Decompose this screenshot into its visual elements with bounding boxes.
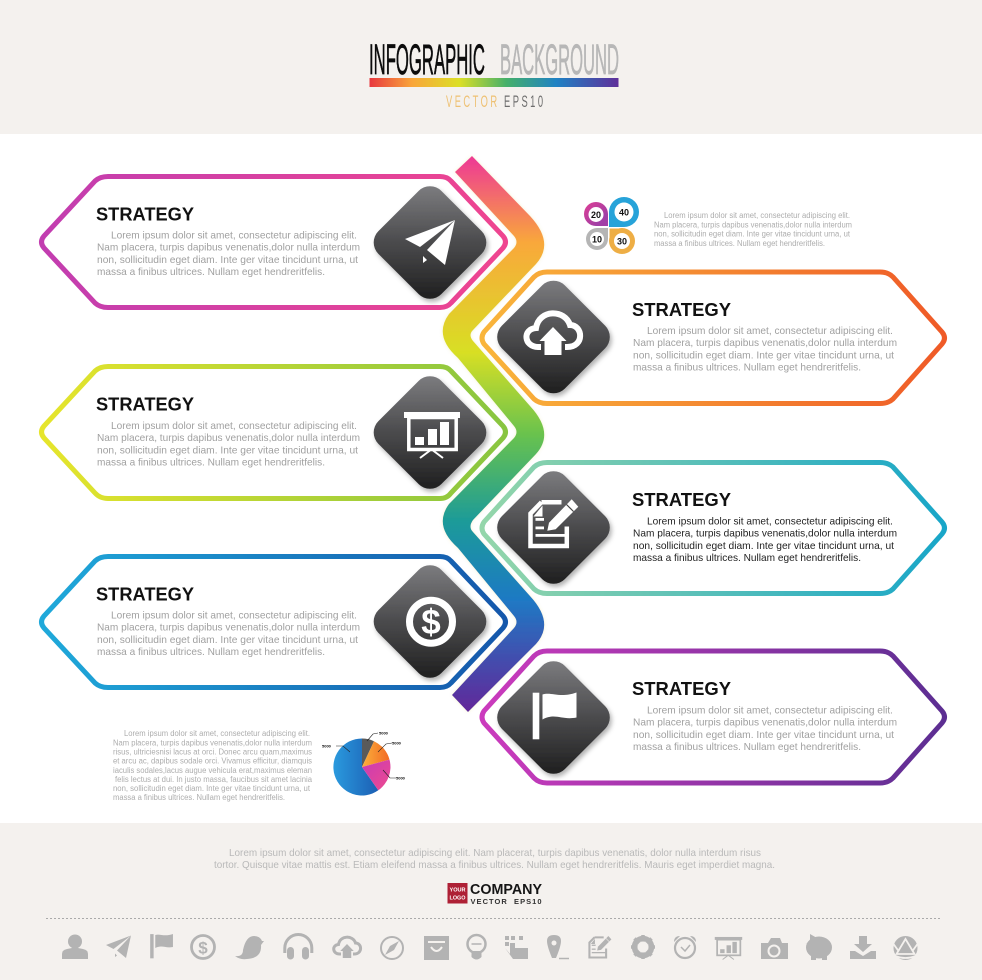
panel 2: strategy right top: Nam placera, turpis dapibus venenatis,dolor nulla interdum [633, 337, 897, 349]
company logo: YOUR [450, 888, 466, 894]
panel 3: strategy left middle: non, sollicitudin eget diam. Inte ger vitae tincidunt urna, ut [97, 444, 358, 456]
icon: flag [150, 934, 173, 958]
icon: alarm clock [674, 936, 696, 958]
text block: lower left note: risus, ultriciesnisi lacus at orci. Donec arcu quam,maximus [113, 748, 312, 756]
panel 2: strategy right top [482, 272, 944, 404]
icon: document pencil diamond [491, 465, 616, 590]
panel 1: strategy left top: non, sollicitudin eget diam. Inte ger vitae tincidunt urna, ut [97, 254, 358, 266]
panel 1: strategy left top [42, 176, 506, 308]
panel 1: strategy left top: STRATEGY [96, 204, 195, 224]
icon: download [850, 936, 876, 959]
text block: lower left note: massa a finibus ultrices. Nullam eget hendreritfelis. [113, 793, 285, 802]
panel 5: strategy left bottom: Lorem ipsum dolor sit amet, consectetur adipiscing elit. [111, 610, 357, 622]
text block: lower left note: iaculis sodales,lacus augue vehicula erat,maximus eleman [113, 766, 312, 775]
panel 4: strategy right middle: STRATEGY [632, 489, 732, 510]
text block: lower left note [113, 729, 313, 802]
icon: chart [715, 937, 742, 959]
text block: top right note: massa a finibus ultrices. Nullam eget hendreritfelis. [654, 239, 825, 248]
text block: lower left note: non, sollicitudin eget diam. Inte ger vitae tincidunt urna, ut [113, 784, 311, 793]
panel 6: strategy right bottom: Lorem ipsum dolor sit amet, consectetur adipiscing elit. [647, 704, 893, 716]
icon: plane [106, 936, 131, 958]
panel 6: strategy right bottom: STRATEGY [632, 678, 732, 699]
icon: piggy bank [805, 934, 832, 960]
text block: top right note: non, sollicitudin eget diam. Inte ger vitae tincidunt urna, ut [654, 230, 851, 238]
panel 3: strategy left middle [42, 366, 506, 498]
icon: document [589, 936, 611, 958]
chart: bubble petals: 40 [619, 208, 629, 218]
footer band [0, 823, 982, 980]
panel 2: strategy right top: STRATEGY [632, 299, 732, 320]
icon: camera [761, 938, 788, 959]
panel 4: strategy right middle: non, sollicitudin eget diam. Inte ger vitae tincidunt urna, ut [633, 540, 894, 552]
panel 6: strategy right bottom [482, 651, 944, 783]
panel 3: strategy left middle: Lorem ipsum dolor sit amet, consectetur adipiscing elit. [111, 420, 357, 432]
text block: lower left note: et arcu ac, dapibus sodale orci. Vivamus efficitur, diamquis [113, 757, 312, 766]
icon: bulb [468, 935, 486, 960]
chart: bubble petals: 30 [617, 236, 627, 246]
text block: footer note [214, 847, 775, 871]
panel 2: strategy right top: massa a finibus ultrices. Nullam eget hendreritfelis. [633, 362, 861, 374]
panel 2: strategy right top: non, sollicitudin eget diam. Inte ger vitae tincidunt urna, ut [633, 349, 894, 361]
footer icon row [62, 934, 918, 960]
panel 3: strategy left middle: Nam placera, turpis dapibus venenatis,dolor nulla interdum [97, 432, 360, 444]
chart: pie: 5000 [396, 776, 406, 780]
chart: bubble petals [584, 197, 639, 254]
icon: hand [505, 936, 528, 959]
panel 3: strategy left middle: STRATEGY [96, 394, 195, 414]
chart: pie [322, 730, 406, 795]
rainbow ribbon [443, 156, 544, 712]
text block: footer note: Lorem ipsum dolor sit amet, consectetur adipiscing elit. Nam placerat, turpis dapibus venenatis, dolor nulla interdum risus [229, 847, 761, 859]
text block: top right note: Lorem ipsum dolor sit amet, consectetur adipiscing elit. [664, 211, 850, 220]
icon: presentation chart diamond [367, 370, 493, 495]
panel 1: strategy left top: massa a finibus ultrices. Nullam eget hendreritfelis. [97, 266, 325, 278]
header band [0, 0, 982, 134]
icon: dollar diamond [367, 559, 493, 684]
icon: dollar [192, 936, 214, 958]
title: EPS10 [504, 92, 543, 111]
panel 4: strategy right middle [482, 462, 944, 594]
icon: compass [381, 937, 403, 959]
title: INFOGRAPHIC [369, 36, 485, 84]
icon: user [62, 934, 88, 959]
icon: cloud upload diamond [491, 274, 616, 400]
chart: pie: 5000 [322, 744, 332, 748]
icon: bird [235, 936, 264, 959]
chart: bubble petals: 10 [592, 234, 602, 244]
panel 4: strategy right middle: Nam placera, turpis dapibus venenatis,dolor nulla interdum [633, 528, 897, 540]
text block: top right note [654, 211, 852, 248]
panel 4: strategy right middle: Lorem ipsum dolor sit amet, consectetur adipiscing elit. [647, 516, 893, 528]
icon: pen nib [547, 935, 569, 958]
text: BACKGROUND [500, 36, 619, 84]
text block: lower left note: Lorem ipsum dolor sit amet, consectetur adipiscing elit. [124, 729, 310, 738]
icon: ball [894, 936, 918, 960]
company logo: COMPANY [470, 882, 542, 898]
title [369, 36, 619, 111]
icon: dollar: $ [198, 938, 208, 958]
panel 5: strategy left bottom [42, 556, 506, 688]
icon: box [424, 936, 449, 960]
panel 1: strategy left top: Nam placera, turpis dapibus venenatis,dolor nulla interdum [97, 242, 360, 254]
panel 5: strategy left bottom: massa a finibus ultrices. Nullam eget hendreritfelis. [97, 646, 325, 658]
text block: lower left note: Nam placera, turpis dapibus venenatis,dolor nulla interdum [113, 738, 312, 748]
icon: cloud [334, 937, 361, 958]
panel 5: strategy left bottom: non, sollicitudin eget diam. Inte ger vitae tincidunt urna, ut [97, 634, 358, 646]
panel 3: strategy left middle: massa a finibus ultrices. Nullam eget hendreritfelis. [97, 456, 325, 468]
icon: headphones [285, 934, 312, 960]
panel 4: strategy right middle: massa a finibus ultrices. Nullam eget hendreritfelis. [633, 552, 861, 564]
panel 6: strategy right bottom: massa a finibus ultrices. Nullam eget hendreritfelis. [633, 741, 861, 753]
icon: flag diamond [491, 655, 616, 780]
text block: top right note: Nam placera, turpis dapibus venenatis,dolor nulla interdum [654, 220, 852, 230]
icon: gear [631, 935, 655, 959]
chart: pie: 5000 [379, 730, 389, 736]
company logo: VECTOR EPS10 [470, 897, 542, 906]
icon: dollar diamond: $ [421, 603, 441, 642]
chart: pie: 5000 [392, 740, 402, 746]
icon: paper plane diamond [367, 180, 493, 305]
chart: bubble petals: 20 [591, 210, 601, 220]
panel 6: strategy right bottom: non, sollicitudin eget diam. Inte ger vitae tincidunt urna, ut [633, 729, 894, 741]
panel 5: strategy left bottom: STRATEGY [96, 584, 195, 604]
panel 5: strategy left bottom: Nam placera, turpis dapibus venenatis,dolor nulla interdum [97, 622, 360, 634]
panel 6: strategy right bottom: Nam placera, turpis dapibus venenatis,dolor nulla interdum [633, 716, 897, 728]
title: VECTOR [446, 92, 497, 111]
panel 2: strategy right top: Lorem ipsum dolor sit amet, consectetur adipiscing elit. [647, 325, 893, 337]
text block: lower left note: felis lectus at dui. In justo massa, faucibus sit amet lacinia [115, 775, 313, 784]
text block: footer note: tortor. Quisque vitae mattis est. Etiam eleifend massa a finibus ultrices. Nullam eget hendreritfelis. Mauris eget imperdiet magna. [214, 859, 775, 871]
company logo: LOGO [450, 896, 466, 902]
panel 1: strategy left top: Lorem ipsum dolor sit amet, consectetur adipiscing elit. [111, 230, 357, 242]
company logo [448, 882, 542, 906]
